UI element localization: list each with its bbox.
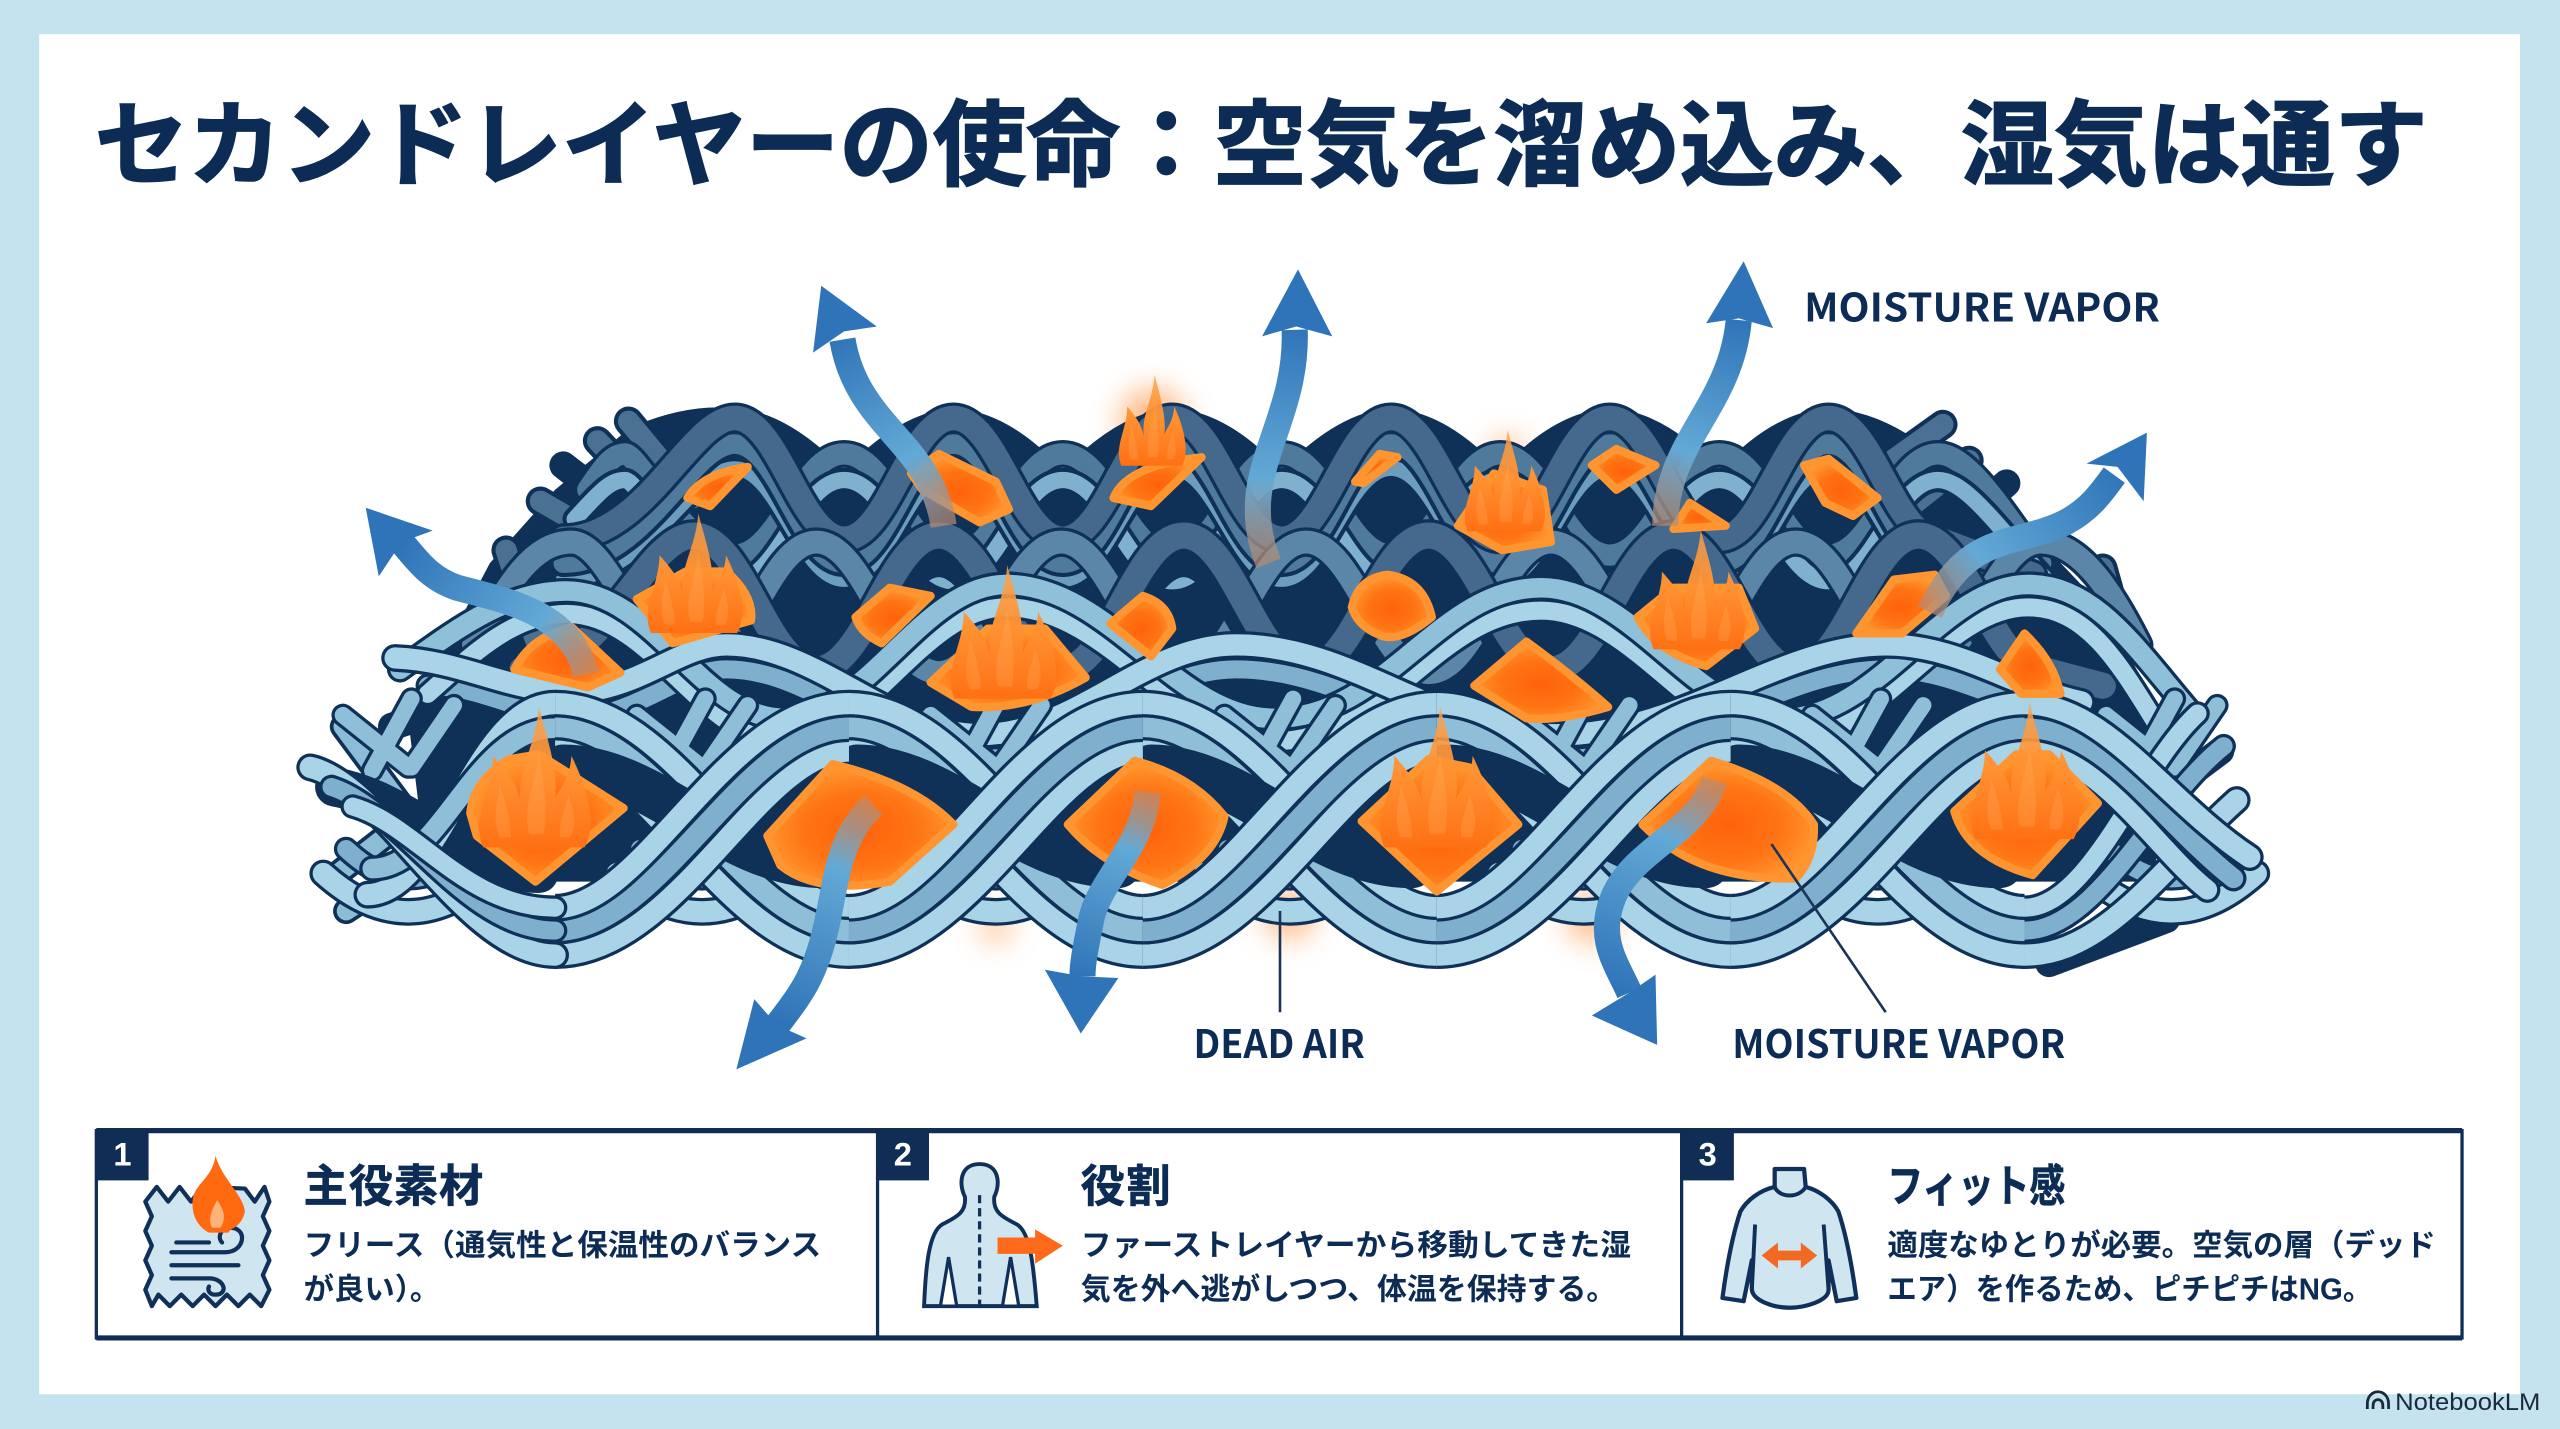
panel: main material <box>96 1130 821 1307</box>
middle row strands <box>395 536 2196 759</box>
flames <box>479 375 2079 847</box>
trapped warm air pockets: middle row <box>514 571 2060 719</box>
watermark: NotebookLM: NotebookLM <box>2395 1389 2540 1416</box>
title: セカンドレイヤーの使命：空気を溜め込み、湿気は通す <box>95 94 2428 198</box>
number badge 1: 1 <box>113 1136 132 1173</box>
warm glow behind fabric <box>678 389 1714 942</box>
icon: sweater with width arrow <box>1722 1169 1856 1308</box>
body text: role: ファーストレイヤーから移動してきた湿 <box>1081 1228 1631 1262</box>
vapor arrow: upper left <box>813 286 944 526</box>
table frame <box>96 1131 2462 1338</box>
vapor arrow: lower left <box>736 805 873 1069</box>
back row strands <box>563 418 2065 612</box>
label: moisture vapor top: MOISTURE VAPOR <box>1804 278 2160 334</box>
vapor arrow: lower center <box>1045 792 1148 1033</box>
number badge 2: 2 <box>894 1136 912 1173</box>
body text: fit: 適度なゆとりが必要。空気の層（デッド <box>1887 1227 2436 1262</box>
trapped warm air pockets: front row <box>470 754 2098 891</box>
panel: role <box>877 1130 1631 1307</box>
body text line 2: エア）を作るため、ピチピチはNG。 <box>1887 1273 2372 1307</box>
body text line 2: が良い）。 <box>304 1272 440 1307</box>
fabric illustration <box>310 261 2256 1069</box>
leader line: moisture vapor <box>1771 844 1886 1012</box>
panel: fit <box>1682 1130 2436 1308</box>
vapor arrow: lower right <box>1592 780 1714 1045</box>
vapor arrow: far right <box>1930 433 2147 612</box>
vapor arrow: upper center <box>1258 269 1332 563</box>
heading: role: 役割 <box>1081 1163 1171 1212</box>
label: dead air: DEAD AIR <box>1193 1014 1365 1070</box>
icon: fleece with flame and wind <box>145 1156 269 1306</box>
heading: fit: フィット感 <box>1887 1163 2065 1212</box>
bottom info table <box>96 1130 2462 1339</box>
number badge 3: 3 <box>1699 1136 1717 1173</box>
trapped warm air pockets: back row <box>687 449 1878 550</box>
body text line 2: 気を外へ逃がしつつ、体温を保持する。 <box>1081 1272 1616 1307</box>
vapor arrow: far left <box>366 508 586 674</box>
number badge 3 <box>1682 1130 1734 1180</box>
label: moisture vapor bottom: MOISTURE VAPOR <box>1732 1014 2065 1070</box>
front row strands <box>310 699 2256 955</box>
number badge 2 <box>877 1130 929 1180</box>
heading: main material: 主役素材 <box>304 1163 483 1212</box>
number badge 1 <box>96 1130 149 1180</box>
icon: body with outward arrow <box>924 1164 1063 1306</box>
body text: main material: フリース（通気性と保温性のバランス <box>304 1228 821 1262</box>
fabric silhouette <box>408 407 2163 882</box>
leader line: dead air <box>1279 911 1281 1012</box>
vapor arrow: upper right <box>1665 261 1773 526</box>
edge fibre stubs <box>338 421 2220 963</box>
